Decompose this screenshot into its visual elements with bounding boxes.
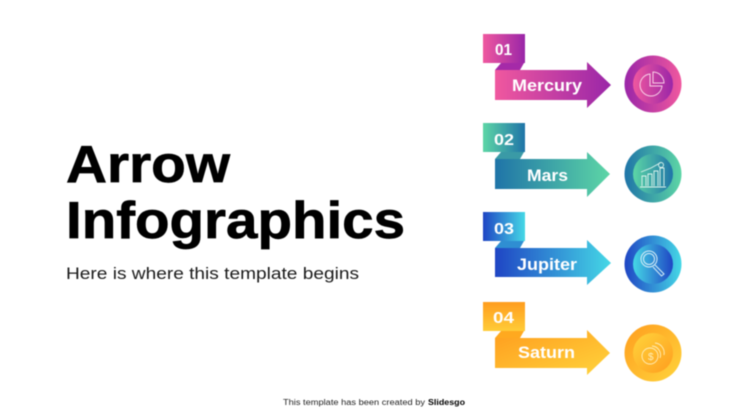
label Jupiter: Jupiter xyxy=(517,255,577,274)
fold 03 xyxy=(495,241,524,248)
arrow Mercury xyxy=(495,62,611,108)
title: Infographics xyxy=(66,192,405,250)
item 04 Saturn xyxy=(483,302,682,382)
icon: magnifier badge xyxy=(624,236,682,292)
item 02 Mars xyxy=(483,123,682,202)
item 01 Mercury xyxy=(483,34,682,112)
number 02: 02 xyxy=(494,132,514,149)
label Saturn: Saturn xyxy=(518,343,575,362)
number tab 02 xyxy=(483,123,525,152)
fold 04 xyxy=(495,331,524,338)
subtitle: Here is where this template begins xyxy=(66,264,359,283)
fold 02 xyxy=(495,152,524,159)
number 04: 04 xyxy=(493,310,514,327)
icon: coins badge: $ xyxy=(648,352,654,363)
title xyxy=(66,136,405,250)
label Mercury: Mercury xyxy=(512,76,583,95)
fold 01 xyxy=(495,63,524,70)
footer credit: This template has been created by xyxy=(283,398,425,407)
number 01: 01 xyxy=(495,42,512,59)
footer credit xyxy=(283,398,465,407)
title: Arrow xyxy=(66,136,231,194)
icon: coins badge xyxy=(624,324,682,382)
arrow Jupiter xyxy=(495,240,611,285)
number tab 03 xyxy=(483,212,525,241)
item 03 Jupiter xyxy=(483,212,682,292)
footer credit: Slidesgo xyxy=(428,398,465,407)
icon: growth chart badge xyxy=(624,146,682,202)
arrow Mars xyxy=(495,152,610,197)
number tab 04 xyxy=(483,302,525,331)
number tab 01 xyxy=(483,34,525,63)
icon: pie chart badge xyxy=(624,56,682,112)
number 03: 03 xyxy=(494,221,514,238)
arrow Saturn xyxy=(495,330,610,375)
label Mars: Mars xyxy=(527,166,568,185)
